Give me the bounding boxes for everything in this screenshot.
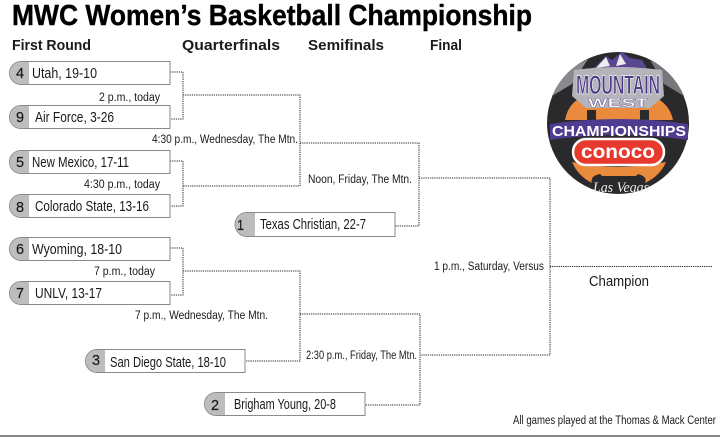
logo: Mountain West Championships: conoco xyxy=(581,142,655,163)
team: Utah: 4 xyxy=(16,65,24,82)
bracket connector lines xyxy=(170,72,712,405)
team: Colorado State: 8 xyxy=(16,199,24,216)
team: Brigham Young: Brigham Young, 20-8 xyxy=(234,397,336,413)
game time labels: 7 p.m., Wednesday, The Mtn. xyxy=(135,310,268,322)
team: Air Force xyxy=(10,106,170,128)
team: UNLV xyxy=(10,282,170,304)
team: Colorado State xyxy=(10,194,170,218)
team: San Diego State xyxy=(86,350,245,372)
game time labels xyxy=(84,92,544,362)
game time labels: 2:30 p.m., Friday, The Mtn. xyxy=(306,350,417,362)
team: Wyoming: Wyoming, 18-10 xyxy=(32,242,122,258)
team: Wyoming xyxy=(10,238,170,260)
heading: first round: First Round xyxy=(12,38,91,54)
team: New Mexico: New Mexico, 17-11 xyxy=(32,155,129,171)
logo: Mountain West Championships: MOUNTAIN xyxy=(576,70,660,100)
game time labels: 4:30 p.m., today xyxy=(84,179,160,191)
team: Texas Christian xyxy=(235,212,395,236)
team: San Diego State: San Diego State, 18-10 xyxy=(110,355,226,371)
team: Wyoming: 6 xyxy=(16,241,24,258)
team: Brigham Young: 2 xyxy=(211,397,219,414)
heading: semifinals: Semifinals xyxy=(308,38,384,54)
logo: Mountain West Championships: Las Vegas xyxy=(592,180,649,196)
team: New Mexico xyxy=(10,150,170,174)
game time labels: 1 p.m., Saturday, Versus xyxy=(434,261,544,273)
team: Air Force: Air Force, 3-26 xyxy=(35,110,114,126)
team: Colorado State: Colorado State, 13-16 xyxy=(35,199,149,215)
team: New Mexico: 5 xyxy=(16,154,24,171)
champion label: Champion xyxy=(589,273,649,290)
game time labels: 4:30 p.m., Wednesday, The Mtn. xyxy=(152,134,298,146)
logo: Mountain West Championships: WEST xyxy=(588,96,649,110)
team: Utah xyxy=(10,62,170,84)
team: UNLV: UNLV, 13-17 xyxy=(35,286,102,302)
game time labels: 7 p.m., today xyxy=(94,266,155,278)
team: Brigham Young xyxy=(205,392,365,416)
team: Utah: Utah, 19-10 xyxy=(32,66,97,82)
bottom rule xyxy=(0,435,720,437)
heading: quarterfinals: Quarterfinals xyxy=(182,38,280,54)
game time labels: Noon, Friday, The Mtn. xyxy=(308,174,412,186)
logo: Mountain West Championships: CHAMPIONSHIPS xyxy=(552,123,686,140)
title: MWC Women’s Basketball Championship xyxy=(12,0,532,32)
team: San Diego State: 3 xyxy=(92,352,100,369)
team: Texas Christian: Texas Christian, 22-7 xyxy=(260,217,366,233)
game time labels: 2 p.m., today xyxy=(99,92,160,104)
logo: Mountain West Championships xyxy=(547,52,689,196)
heading: final: Final xyxy=(430,38,462,54)
team: Air Force: 9 xyxy=(16,109,24,126)
team: Texas Christian: 1 xyxy=(237,217,244,234)
team: UNLV: 7 xyxy=(16,285,24,302)
